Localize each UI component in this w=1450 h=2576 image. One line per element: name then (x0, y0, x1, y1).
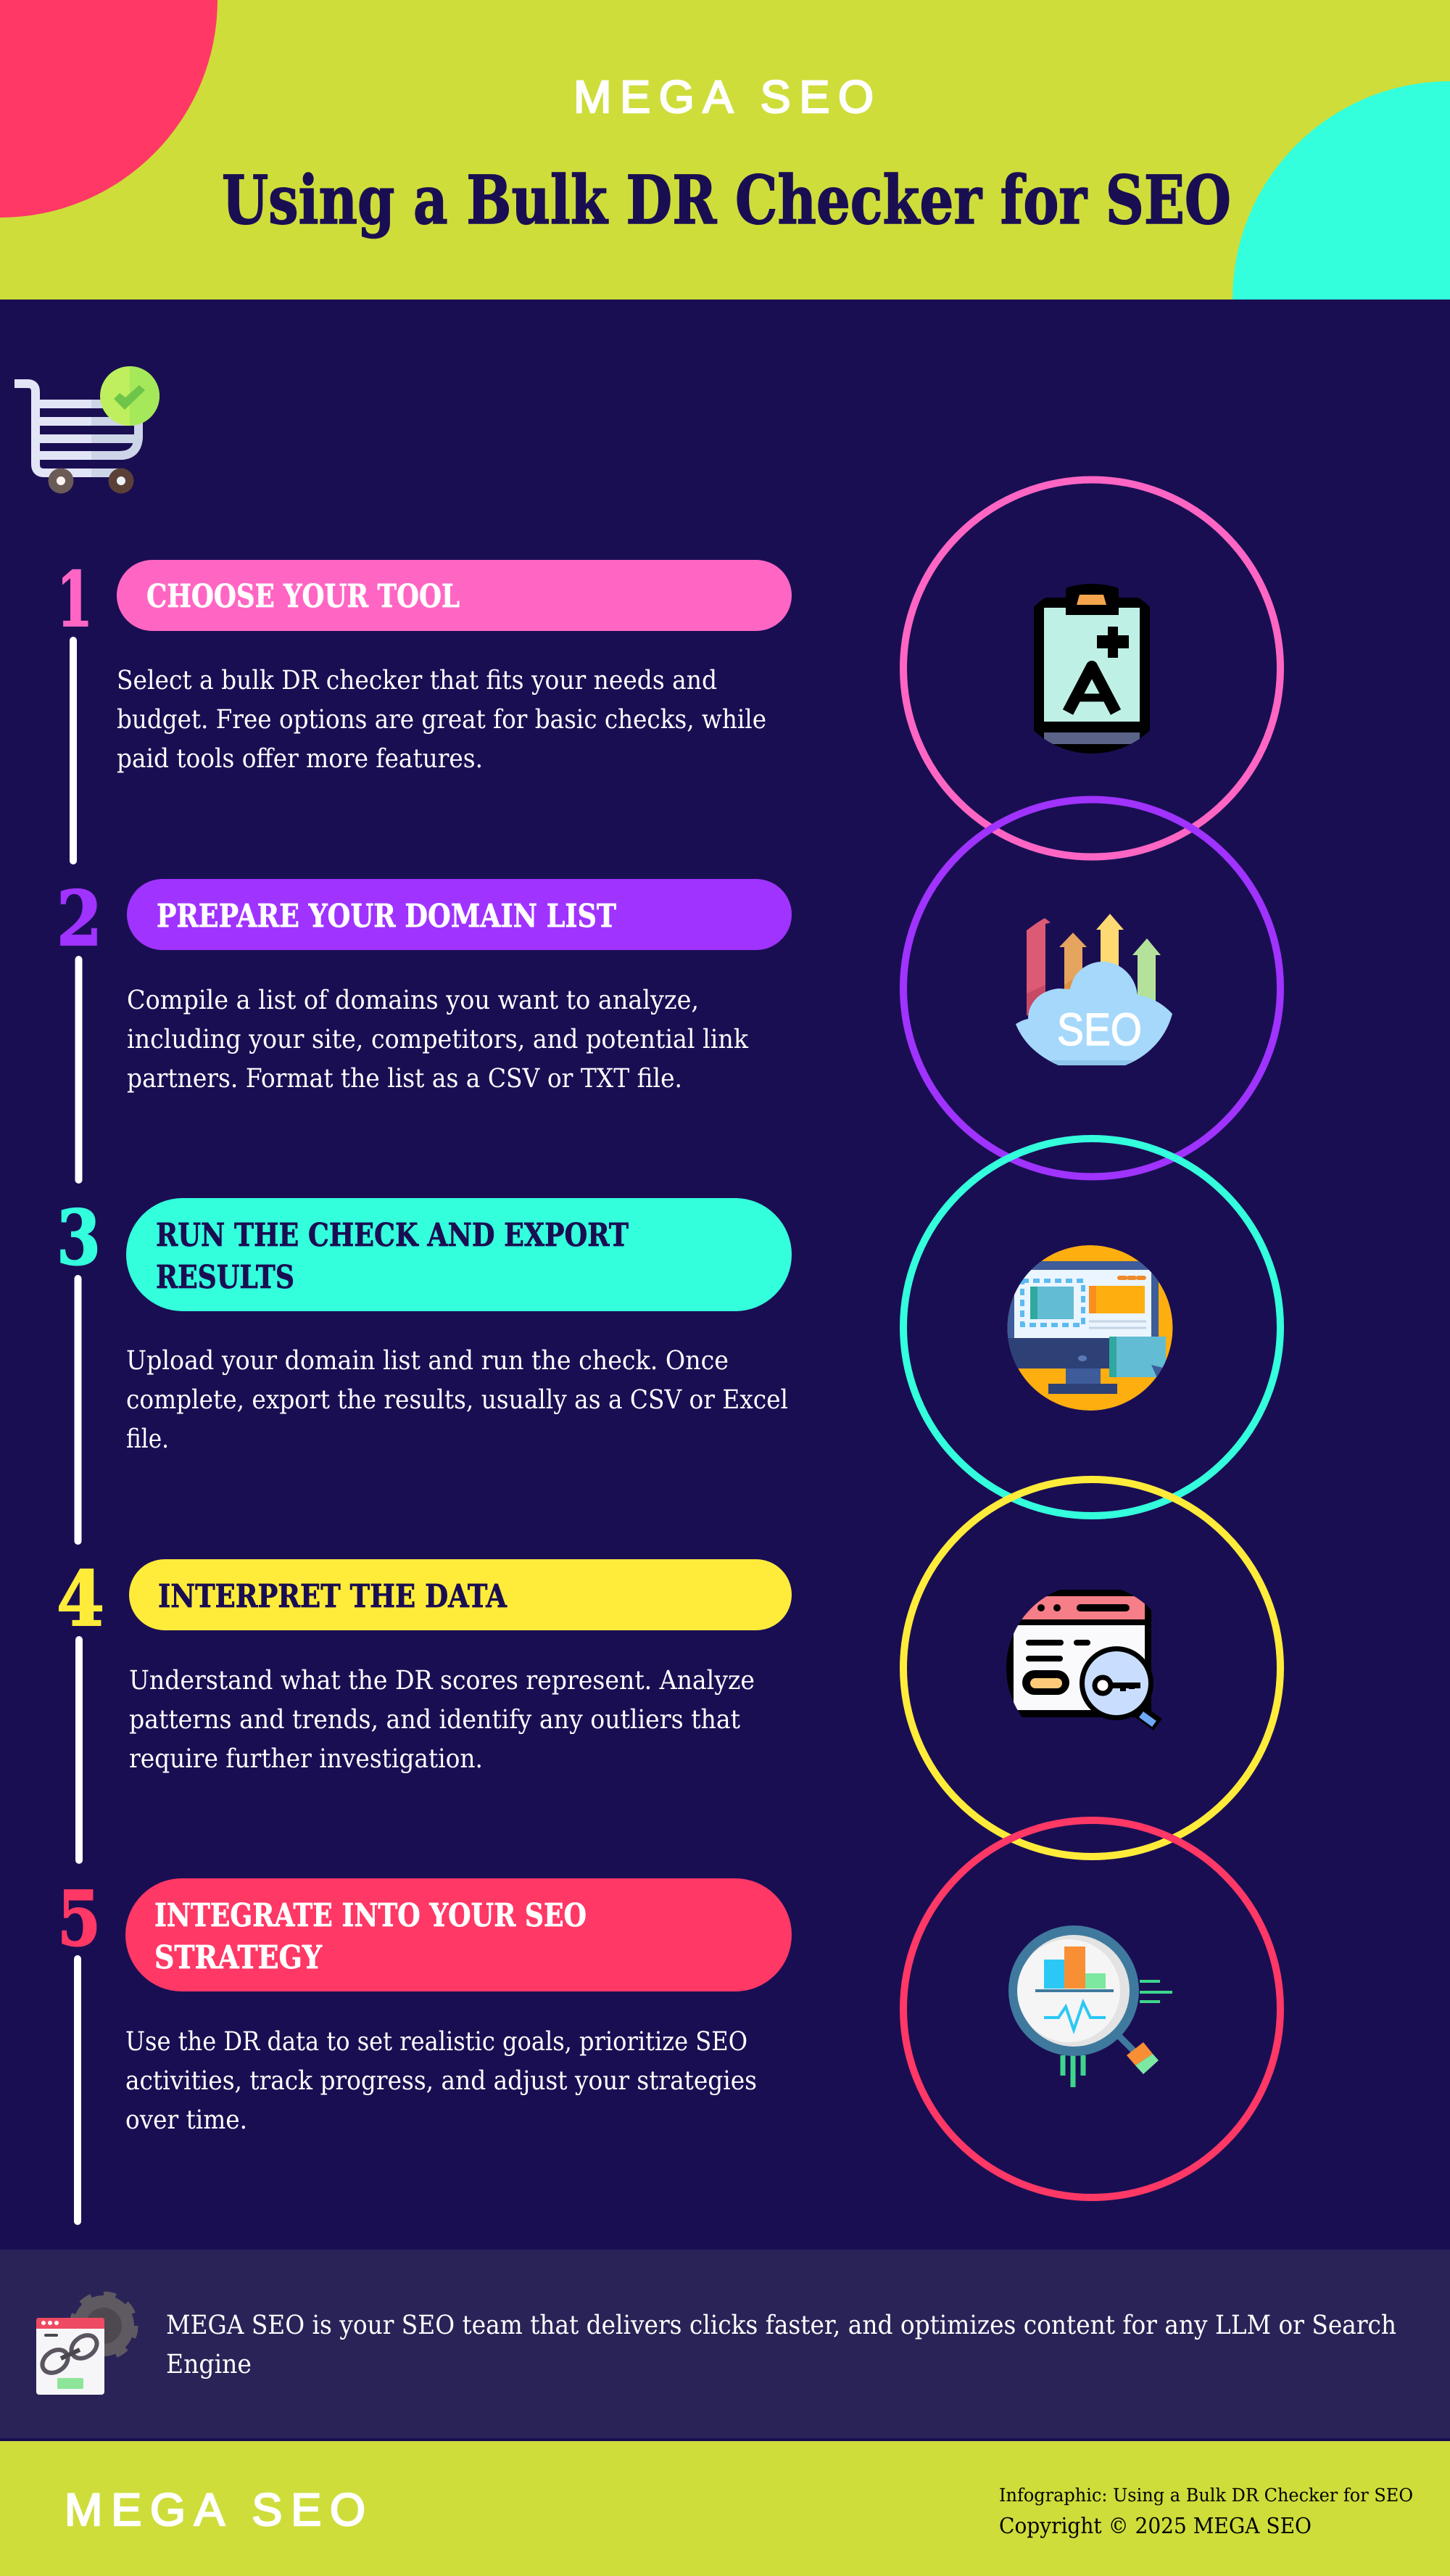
step 5 description: over time. (125, 2105, 247, 2135)
step 2 description (127, 986, 749, 1094)
step 5 (57, 1874, 792, 2225)
step 3 heading pill: RESULTS (156, 1259, 294, 1296)
step 2 heading pill (127, 879, 792, 950)
step 1 heading pill (117, 560, 792, 631)
step 5 vertical line (74, 1955, 81, 2225)
ring 2: purple (903, 799, 1280, 1176)
icon: shopping cart with check (14, 366, 160, 493)
step 3 vertical line (74, 1275, 81, 1545)
step 4 description: require further investigation. (129, 1744, 483, 1774)
step 4 description: Understand what the DR scores represent. Analyze (129, 1666, 755, 1696)
step 2 vertical line (75, 956, 83, 1184)
step 3 heading pill (126, 1198, 792, 1311)
header panel (0, 0, 1450, 300)
step 4 heading pill: INTERPRET THE DATA (158, 1578, 508, 1615)
step 3 (57, 1193, 792, 1545)
step 4 number: 4 (57, 1554, 104, 1643)
ring 5: red (903, 1820, 1280, 2197)
step 1 description: paid tools offer more features. (117, 744, 483, 774)
step 2 (57, 874, 792, 1184)
callout text: Engine (166, 2350, 252, 2379)
step 4 (57, 1554, 792, 1864)
step 3 description: complete, export the results, usually as a CSV or Excel (126, 1385, 788, 1415)
step 5 number: 5 (57, 1874, 101, 1963)
icon: monitor with card (1004, 1245, 1173, 1411)
footer copyright: Copyright © 2025 MEGA SEO (999, 2514, 1312, 2539)
step 2 heading pill: PREPARE YOUR DOMAIN LIST (157, 898, 616, 935)
decorative corner circle: red (0, 0, 218, 218)
step 4 heading pill (129, 1559, 792, 1630)
ring 1: pink (903, 480, 1280, 857)
step 5 heading pill: INTEGRATE INTO YOUR SEO (154, 1897, 587, 1934)
decorative corner circle: teal (1232, 81, 1450, 300)
step 4 description (129, 1666, 755, 1774)
step 3 description: Upload your domain list and run the check. Once (126, 1346, 729, 1376)
step 5 heading pill (125, 1878, 792, 1991)
step 3 description: file. (126, 1424, 169, 1454)
step 1 vertical line (70, 637, 77, 864)
footer band (0, 2441, 1450, 2576)
callout text (166, 2311, 1396, 2379)
step 1 description: Select a bulk DR checker that fits your needs and (117, 666, 717, 695)
icon: A+ clipboard (1034, 584, 1150, 757)
header logo: MEGA SEO: MEGA SEO (573, 72, 874, 123)
step 1 (57, 555, 792, 864)
step 2 description: including your site, competitors, and potential link (127, 1025, 749, 1054)
step 2 number: 2 (57, 874, 102, 963)
step 5 description: activities, track progress, and adjust your strategies (125, 2066, 757, 2096)
step 4 vertical line (75, 1636, 83, 1864)
ring 4: yellow (903, 1479, 1280, 1857)
callout band (0, 2250, 1450, 2438)
step 3 heading pill: RUN THE CHECK AND EXPORT (156, 1217, 629, 1254)
title: Using a Bulk DR Checker for SEO (222, 161, 1231, 239)
footer logo: MEGA SEO: MEGA SEO (65, 2485, 365, 2535)
step 3 description (126, 1346, 788, 1454)
step 5 description (125, 2027, 757, 2135)
step 2 description: Compile a list of domains you want to analyze, (127, 986, 699, 1015)
icon: link window with gear (36, 2294, 136, 2395)
icon: SEO cloud with arrows (1016, 914, 1172, 1065)
step 5 heading pill: STRATEGY (154, 1939, 322, 1976)
step 3 number: 3 (57, 1193, 101, 1282)
step 1 number: 1 (57, 555, 93, 644)
step 2 description: partners. Format the list as a CSV or TXT file. (127, 1064, 682, 1094)
ring 3: teal (903, 1139, 1280, 1516)
step 1 heading pill: CHOOSE YOUR TOOL (146, 578, 460, 615)
footer caption: Infographic: Using a Bulk DR Checker for SEO (999, 2485, 1413, 2506)
icon label: SEO: SEO (1057, 1004, 1142, 1055)
step 1 description (117, 666, 766, 774)
step 4 description: patterns and trends, and identify any outliers that (129, 1705, 740, 1735)
icon: window with magnified key (1006, 1590, 1158, 1725)
icon: magnifier with chart (1008, 1925, 1172, 2087)
step 5 description: Use the DR data to set realistic goals, prioritize SEO (125, 2027, 747, 2057)
step 1 description: budget. Free options are great for basic checks, while (117, 705, 766, 735)
